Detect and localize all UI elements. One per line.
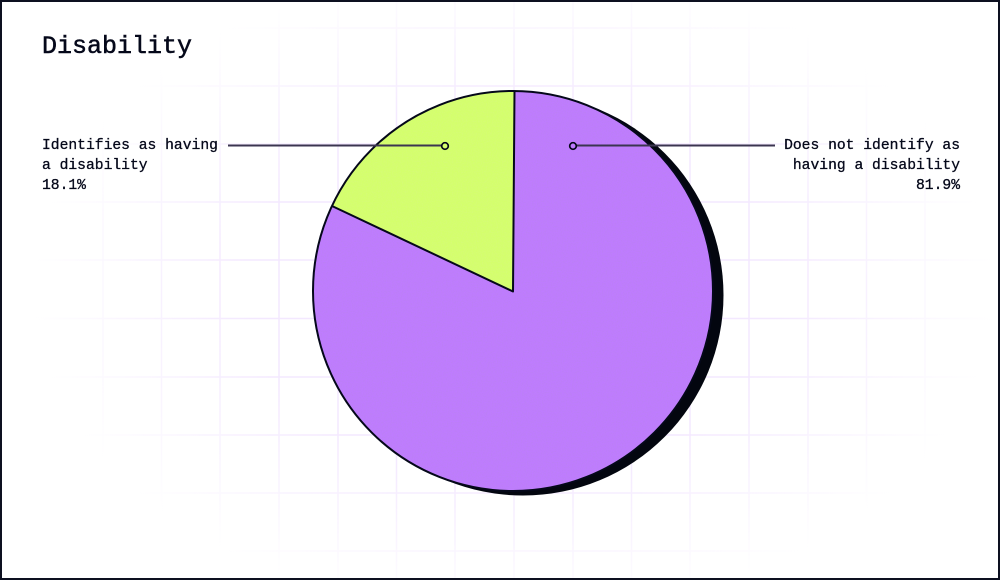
- pie chart: [313, 91, 724, 495]
- label: identifies as having a disability: 18.1%: [42, 178, 86, 194]
- slice: does not identify, 81.9%: [313, 91, 713, 491]
- pie shadow: [322, 94, 724, 496]
- leader line: does not identify: [570, 143, 775, 149]
- label: identifies as having a disability: Identifies as having: [42, 138, 218, 154]
- leader line: identifies: [228, 143, 448, 149]
- label: does not identify as having a disability: having a disability: [793, 158, 960, 174]
- title: Disability: [42, 32, 192, 61]
- pie outline: [313, 91, 713, 491]
- slice: identifies, 18.1%: [332, 91, 514, 291]
- label: identifies as having a disability: a disability: [42, 158, 148, 174]
- label: does not identify as having a disability: 81.9%: [916, 178, 960, 194]
- label: does not identify as having a disability: Does not identify as: [784, 138, 960, 154]
